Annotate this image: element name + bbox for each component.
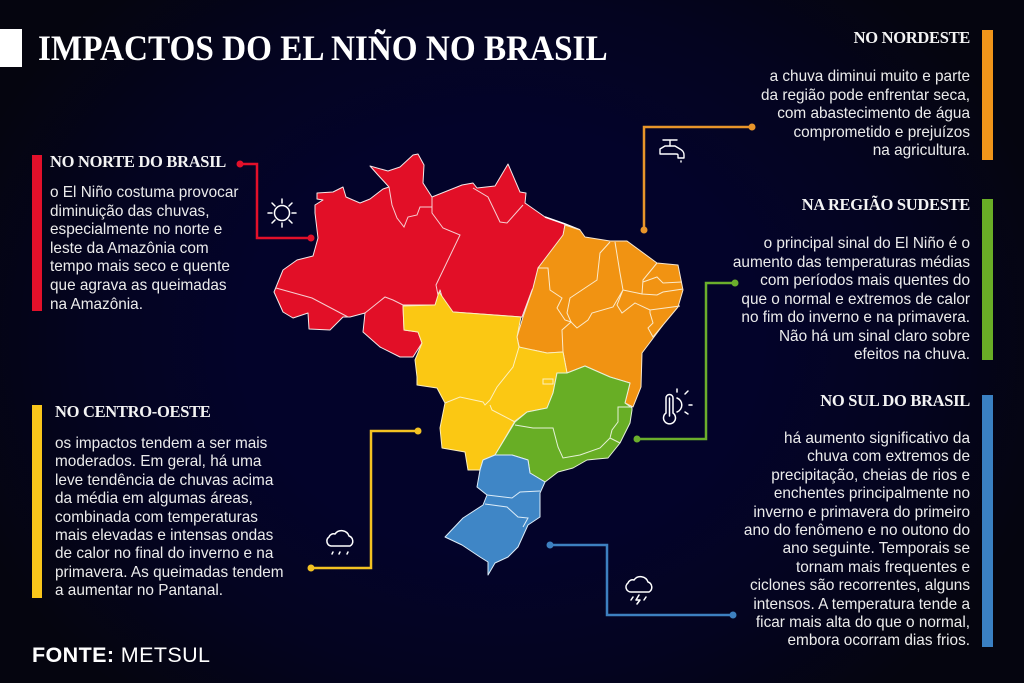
panel: nordeste [761, 28, 993, 160]
arrow: norte connector [236, 160, 314, 242]
title: IMPACTOS DO EL NIÑO NO BRASIL [38, 28, 608, 68]
norte colour bar [32, 155, 42, 311]
sul text: inverno e primavera do primeiro [753, 504, 970, 521]
sudeste text: com períodos mais quentes do [760, 272, 970, 289]
sudeste heading: NA REGIÃO SUDESTE [802, 195, 970, 214]
norte text: tempo mais seco e quente [50, 258, 230, 275]
map: sul region [445, 455, 545, 575]
panel: norte [32, 152, 238, 313]
nordeste text: com abastecimento de água [777, 105, 970, 122]
sul text: enchentes principalmente no [774, 485, 970, 502]
nordeste text: na agricultura. [873, 142, 970, 159]
arrow: sul connector [546, 542, 736, 618]
arrow: centro-oeste connector [308, 428, 422, 572]
sul text: intensos. A temperatura tende a [753, 596, 970, 613]
sudeste text: que o normal e extremos de calor [741, 290, 970, 308]
centro-oeste text: a aumentar no Pantanal. [55, 582, 223, 599]
sul text [744, 430, 970, 649]
sul colour bar [982, 395, 993, 647]
panel: sudeste [733, 195, 993, 363]
sul text: tornam mais frequentes e [796, 559, 970, 576]
sul text: há aumento significativo da [784, 430, 970, 447]
arrow: nordeste connector [640, 124, 756, 234]
sul text: precipitação, cheias de rios e [771, 467, 970, 484]
norte text: diminuição das chuvas, [50, 203, 210, 220]
centro-oeste text: os impactos tendem a ser mais [55, 435, 267, 452]
sul heading: NO SUL DO BRASIL [820, 391, 970, 410]
nordeste text: a chuva diminui muito e parte [770, 68, 970, 85]
centro-oeste heading: NO CENTRO-OESTE [55, 402, 210, 421]
norte text [50, 184, 238, 313]
sudeste text: aumento das temperaturas médias [733, 254, 970, 270]
nordeste text: comprometido e prejuízos [793, 124, 970, 140]
norte text: o El Niño costuma provocar [50, 184, 238, 201]
sul text: ficar mais alta do que o normal, [756, 614, 970, 631]
centro-oeste text: leve tendência de chuvas acima [55, 472, 273, 489]
nordeste text [761, 68, 970, 159]
norte text: que agrava as queimadas [50, 277, 227, 294]
panel: centro-oeste [32, 402, 284, 599]
icon: storm cloud [626, 577, 652, 604]
sul text: chuva com extremos de [807, 448, 970, 465]
centro-oeste text: primavera. As queimadas tendem [55, 564, 284, 581]
norte text: especialmente no norte e [50, 221, 222, 238]
sudeste text [733, 235, 970, 363]
centro-oeste text: combinada com temperaturas [55, 509, 258, 526]
map: norte region [274, 154, 580, 357]
sudeste text: o principal sinal do El Niño é o [764, 235, 970, 252]
centro-oeste text: moderados. Em geral, há uma [55, 453, 261, 470]
sul text: ano seguinte. Temporais se [783, 540, 970, 557]
map: sudeste region [495, 366, 632, 482]
centro-oeste colour bar [32, 405, 42, 598]
norte heading: NO NORTE DO BRASIL [50, 152, 226, 171]
centro-oeste text [55, 435, 284, 599]
sudeste text: no fim do inverno e na primavera. [741, 309, 970, 326]
sudeste text: efeitos na chuva. [854, 346, 970, 363]
icon: rain cloud [327, 531, 353, 554]
nordeste text: da região pode enfrentar seca, [761, 86, 970, 104]
map: nordeste region [517, 225, 683, 407]
nordeste heading: NO NORDESTE [854, 28, 970, 47]
icon: faucet [660, 140, 684, 162]
icon: sun [268, 199, 296, 227]
norte text: leste da Amazônia com [50, 240, 209, 257]
map: centro-oeste region [403, 292, 567, 470]
centro-oeste text: de calor no final do inverno e na [55, 545, 273, 562]
sul text: ano do fenômeno e no outono do [744, 522, 970, 539]
icon: thermometer and sun [664, 389, 692, 424]
sudeste text: Não há um sinal claro sobre [779, 328, 970, 344]
centro-oeste text: mais elevadas e intensas ondas [55, 527, 273, 544]
panel: sul [744, 391, 993, 649]
nordeste colour bar [982, 30, 993, 160]
sul text: ciclones são recorrentes, alguns [750, 577, 970, 594]
sudeste colour bar [982, 199, 993, 360]
arrow: sudeste connector [634, 280, 738, 442]
norte text: na Amazônia. [50, 296, 143, 313]
title marker block [0, 29, 22, 67]
centro-oeste text: da média em algumas áreas, [55, 490, 253, 507]
sul text: embora ocorram dias frios. [788, 632, 970, 649]
source: FONTE: METSUL [32, 643, 210, 667]
